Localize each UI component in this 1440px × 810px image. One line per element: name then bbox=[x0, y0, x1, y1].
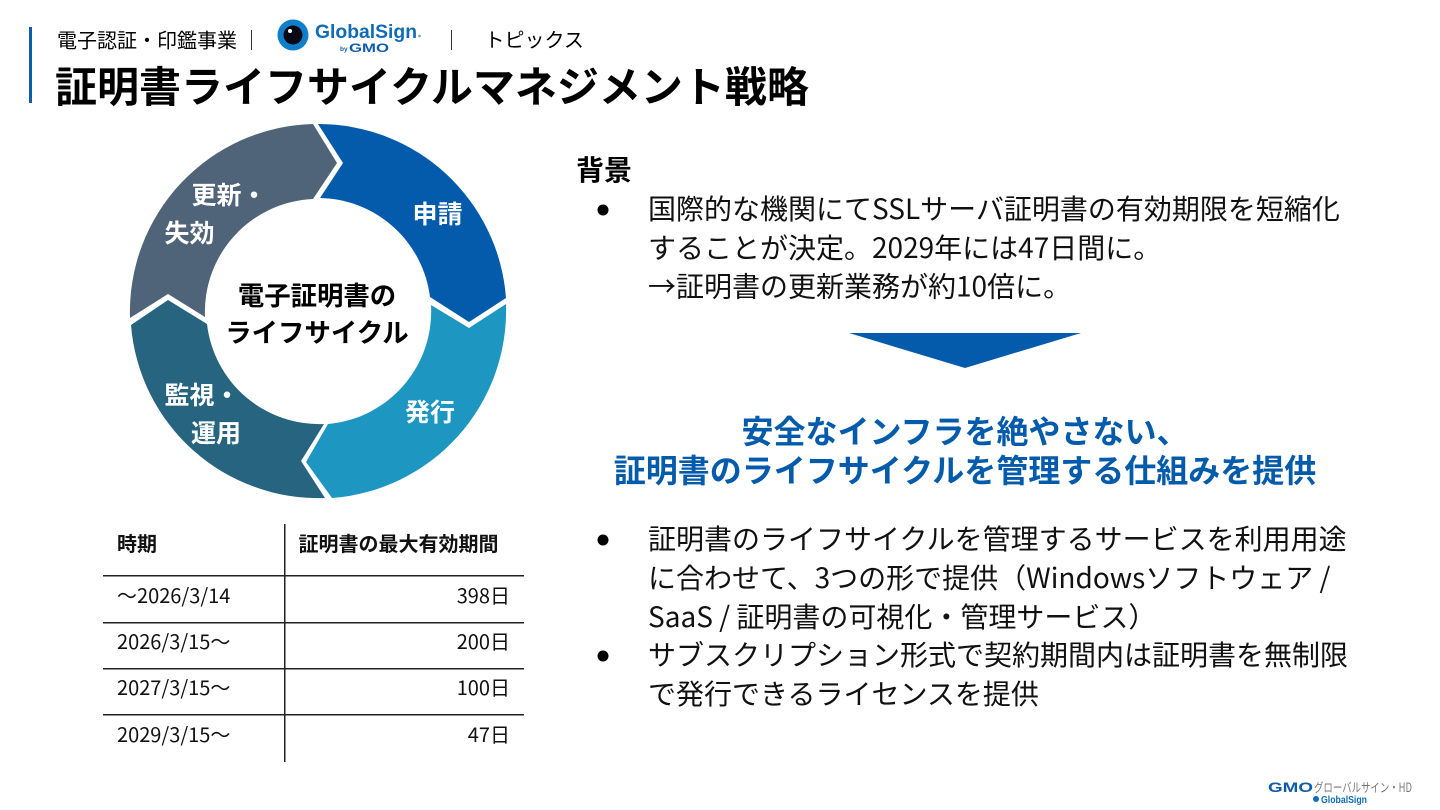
logo: GlobalSign by GMO: GlobalSign bbox=[315, 21, 417, 43]
service bullet block: SaaS / 証明書の可視化・管理サービス） bbox=[648, 596, 1156, 636]
row 2 bbox=[117, 626, 510, 655]
service bullet block: に合わせて、3つの形で提供（Windowsソフトウェア / bbox=[648, 557, 1331, 597]
center label: ライフサイクル bbox=[225, 311, 409, 350]
header label: トピックス: トピックス bbox=[484, 24, 584, 53]
logo: GlobalSign by GMO bbox=[278, 20, 421, 55]
header divider left bbox=[251, 30, 252, 50]
footer logo: GMO グローバルサイン・HD: GMO bbox=[1268, 779, 1313, 795]
row 3: 2027/3/15～ bbox=[117, 672, 230, 701]
arrow: down bbox=[849, 333, 1081, 368]
row 4: 47日 bbox=[468, 719, 510, 748]
row 1 bbox=[117, 580, 510, 609]
lifecycle diagram bbox=[130, 124, 506, 498]
segment: 発行 bbox=[306, 304, 506, 498]
label: 更新・失効: 失効 bbox=[164, 214, 215, 250]
segment: 申請 bbox=[318, 124, 506, 322]
highlighted message: 安全なインフラを絶やさない、 bbox=[741, 407, 1189, 453]
icon: eye bbox=[278, 20, 308, 50]
row 2: 2026/3/15～ bbox=[117, 626, 230, 655]
highlighted message: 証明書のライフサイクルを管理する仕組みを提供 bbox=[614, 446, 1316, 492]
service bullet block: で発行できるライセンスを提供 bbox=[648, 673, 1039, 713]
footer logo: GMO グローバルサイン・HD: GlobalSign bbox=[1321, 795, 1367, 806]
segment: 監視・運用 bbox=[131, 300, 325, 498]
row 3: 100日 bbox=[457, 672, 510, 701]
table header bbox=[117, 528, 498, 557]
service bullet block: 証明書のライフサイクルを管理するサービスを利用用途 bbox=[648, 518, 1347, 558]
logo: GlobalSign by GMO: GMO bbox=[349, 41, 389, 55]
segment: 更新・失効 bbox=[130, 124, 337, 318]
background bullet block: することが決定。2029年には47日間に。 bbox=[648, 227, 1161, 267]
label: 申請: 申請 bbox=[412, 195, 463, 231]
logo: GlobalSign by GMO: by bbox=[340, 46, 348, 53]
background bullet block bbox=[598, 188, 1340, 306]
row 3 bbox=[117, 672, 510, 701]
header divider right bbox=[451, 30, 452, 50]
row 2: 200日 bbox=[457, 626, 510, 655]
row 1: 398日 bbox=[457, 580, 510, 609]
header accent bar bbox=[29, 27, 32, 103]
row 4: 2029/3/15～ bbox=[117, 719, 230, 748]
row 1: ～2026/3/14 bbox=[117, 580, 230, 609]
table header: 時期 bbox=[117, 528, 157, 557]
center label: 電子証明書の bbox=[238, 274, 396, 313]
label: 更新・失効: 更新・ bbox=[192, 176, 267, 212]
label: 発行: 発行 bbox=[405, 393, 455, 429]
label: 監視・運用: 運用 bbox=[191, 414, 241, 450]
label: 監視・運用: 監視・ bbox=[164, 376, 240, 412]
service bullet block bbox=[598, 518, 1348, 713]
background bullet block: 国際的な機関にてSSLサーバ証明書の有効期限を短縮化 bbox=[648, 188, 1340, 228]
table: certificate maximum validity bbox=[103, 524, 524, 762]
background bullet block: →証明書の更新業務が約10倍に。 bbox=[648, 266, 1071, 306]
row 4 bbox=[117, 719, 510, 748]
title: 証明書ライフサイクルマネジメント戦略 bbox=[55, 54, 809, 115]
header category: 電子認証・印鑑事業: 電子認証・印鑑事業 bbox=[57, 24, 237, 54]
table grid bbox=[103, 524, 524, 762]
footer logo: GMO グローバルサイン・HD bbox=[1268, 777, 1412, 806]
table header: 証明書の最大有効期間 bbox=[298, 528, 498, 557]
heading: 背景: 背景 bbox=[576, 149, 632, 189]
service bullet block: サブスクリプション形式で契約期間内は証明書を無制限 bbox=[648, 634, 1348, 674]
